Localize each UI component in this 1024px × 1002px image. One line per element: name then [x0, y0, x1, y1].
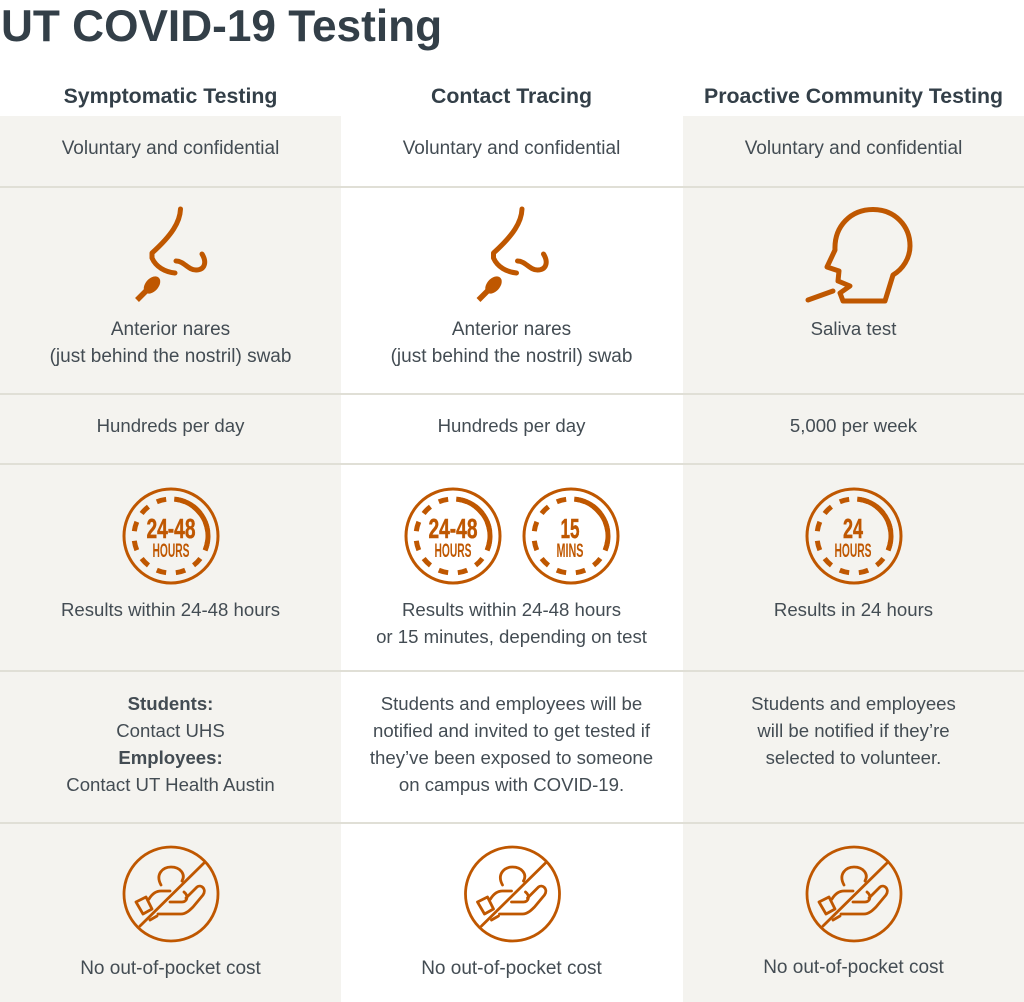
text: voluntary, column 2: Voluntary and confidential	[403, 138, 620, 159]
text: how to get tested, column 3: Students and employees	[751, 693, 956, 714]
text: capacity, column 3: 5,000 per week	[790, 415, 917, 436]
text: how to get tested, column 1: Students:	[128, 693, 213, 714]
icon: 24-48 hours clock, column 1: HOURS	[152, 541, 190, 562]
text: cost, column 2: No out-of-pocket cost	[421, 958, 602, 979]
text: how to get tested, column 2: they’ve been exposed to someone	[370, 747, 653, 768]
title: UT COVID-19 Testing	[1, 2, 442, 51]
text: results, column 2	[376, 599, 647, 647]
text: how to get tested, column 1	[66, 693, 275, 795]
text: results, column 1: Results within 24-48 hours	[61, 599, 280, 620]
text: capacity, column 1: Hundreds per day	[97, 415, 244, 436]
icon: 24-48 hours clock, column 2: 24-48	[428, 513, 478, 544]
text: how to get tested, column 1: Employees:	[118, 747, 223, 768]
text: swab, column 1: (just behind the nostril) swab	[50, 346, 291, 367]
icon: 24-48 hours clock, column 1: 24-48	[146, 513, 196, 544]
text: how to get tested, column 2: on campus with COVID-19.	[399, 774, 624, 795]
text: swab, column 2	[391, 319, 632, 367]
text: how to get tested, column 2	[370, 693, 653, 795]
text: how to get tested, column 2: notified and invited to get tested if	[373, 720, 650, 741]
text: results, column 3: Results in 24 hours	[774, 599, 933, 620]
icon: 24 hours clock: HOURS	[834, 541, 872, 562]
icon: 24-48 hours clock, column 2: HOURS	[434, 541, 472, 562]
text: swab, column 1	[50, 319, 291, 367]
icon: 15 minutes clock: 15	[560, 513, 580, 544]
heading: proactive community testing: Proactive Community Testing	[704, 84, 1003, 108]
text: swab, column 2: (just behind the nostril) swab	[391, 346, 632, 367]
text: voluntary, column 1: Voluntary and confidential	[62, 138, 279, 159]
text: how to get tested, column 3: will be notified if they’re	[757, 720, 950, 741]
text: cost, column 1: No out-of-pocket cost	[80, 958, 261, 979]
icon: 24 hours clock: 24	[843, 513, 863, 544]
text: how to get tested, column 3	[751, 693, 956, 768]
heading: contact tracing: Contact Tracing	[431, 84, 592, 108]
text: how to get tested, column 1: Contact UHS	[116, 720, 225, 741]
text: how to get tested, column 3: selected to volunteer.	[766, 747, 941, 768]
text: swab, column 1: Anterior nares	[111, 319, 230, 340]
text: cost, column 3: No out-of-pocket cost	[763, 957, 944, 978]
text: results, column 2: or 15 minutes, depending on test	[376, 626, 647, 647]
text: voluntary, column 3: Voluntary and confidential	[745, 138, 962, 159]
text: how to get tested, column 1: Contact UT Health Austin	[66, 774, 275, 795]
icon: 15 minutes clock: MINS	[556, 541, 584, 562]
text: how to get tested, column 2: Students and employees will be	[381, 693, 642, 714]
text: swab, column 2: Anterior nares	[452, 319, 571, 340]
text: saliva: Saliva test	[811, 318, 896, 339]
text: capacity, column 2: Hundreds per day	[438, 415, 585, 436]
text: results, column 2: Results within 24-48 hours	[402, 599, 621, 620]
heading: symptomatic testing: Symptomatic Testing	[64, 84, 277, 108]
